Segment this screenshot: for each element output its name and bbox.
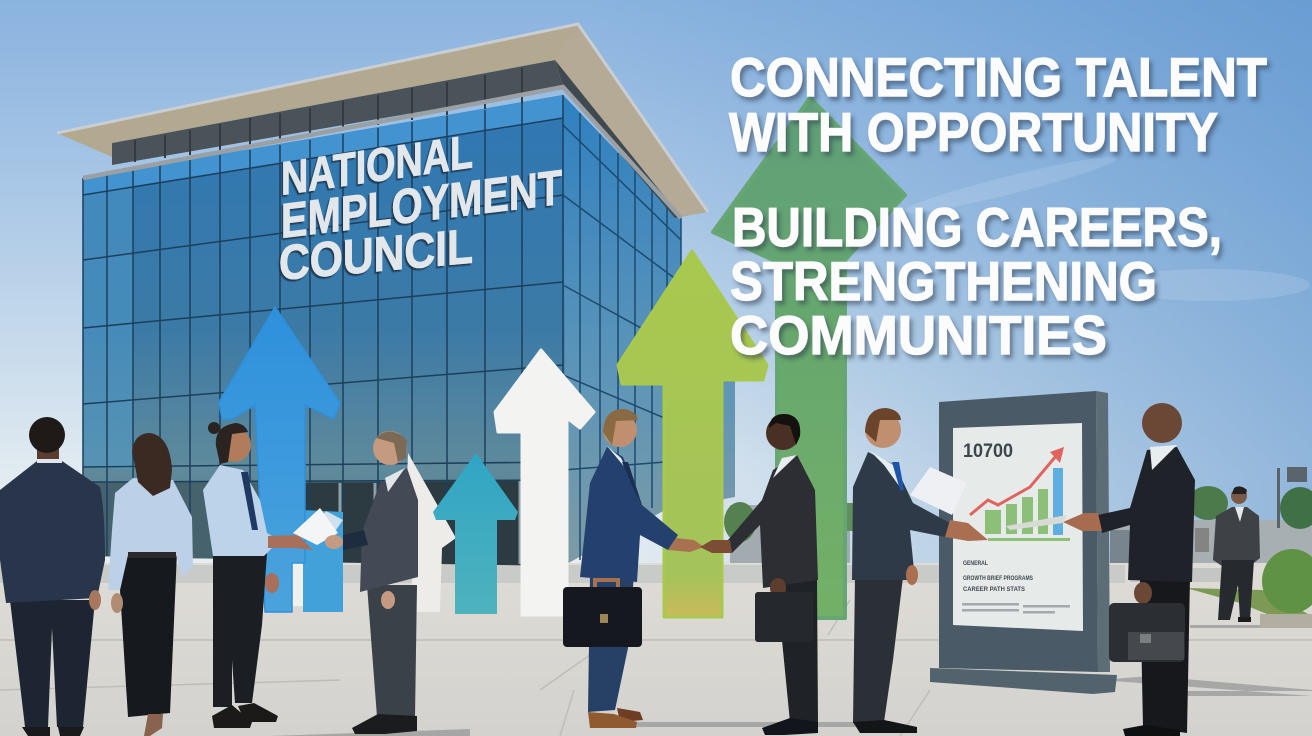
distant person [1213,486,1260,622]
kiosk small text [963,560,1034,593]
kiosk number: 10700 [963,441,1013,462]
title text: CONNECTING TALENT [730,46,1267,108]
title text: COMMUNITIES [730,304,1107,366]
building sign: National Employment Council: EMPLOYMENT [281,160,562,249]
person 8: man in black suit with briefcase [1063,403,1195,736]
arrow: large green [713,98,905,618]
paper: handed over [293,508,343,545]
person 3: woman holding paper [203,422,313,728]
person 1: back view in dark suit [0,417,105,736]
paper held over kiosk [1006,515,1067,530]
kiosk small text: GROWTH BRIEF PROGRAMS [963,575,1034,582]
person 2: woman in light blue shirt [108,433,193,736]
briefcase: person 8 [1109,603,1185,662]
building: front glass facade [83,95,566,566]
building: roof [57,24,708,218]
background trees and buildings [724,467,1312,570]
building sign: National Employment Council: NATIONAL [281,125,473,206]
arrow: blue [219,307,343,612]
kiosk with growth chart [930,391,1117,694]
arrow: lime [618,251,767,617]
kiosk small text: GENERAL [963,560,988,567]
building: side glass facade [563,95,735,566]
ground plaza [0,563,1312,736]
arrow: teal [433,453,518,614]
briefcase: person 6 [755,592,813,642]
person 4: man in grey suit [325,431,418,734]
person 7: man holding document [852,408,988,733]
kiosk small text: CAREER PATH STATS [963,586,1026,593]
title text [729,46,1267,366]
title text: BUILDING CAREERS, [732,196,1222,258]
building sign: National Employment Council: COUNCIL [279,220,473,291]
building sign: National Employment Council [279,125,562,291]
hedge [1260,549,1312,628]
clouds [901,150,1310,301]
arrow: large white [495,350,594,615]
briefcase: person 5 [563,580,642,647]
kiosk trend arrow [970,456,1056,515]
person 6: man in black suit [700,414,818,735]
kiosk bar chart [985,468,1070,541]
person 5: man in navy suit [580,409,704,728]
title text: WITH OPPORTUNITY [729,101,1218,163]
building: lobby floor [83,480,566,566]
arrow: small white [405,453,456,612]
title text: STRENGTHENING [730,250,1157,312]
building [57,24,735,566]
